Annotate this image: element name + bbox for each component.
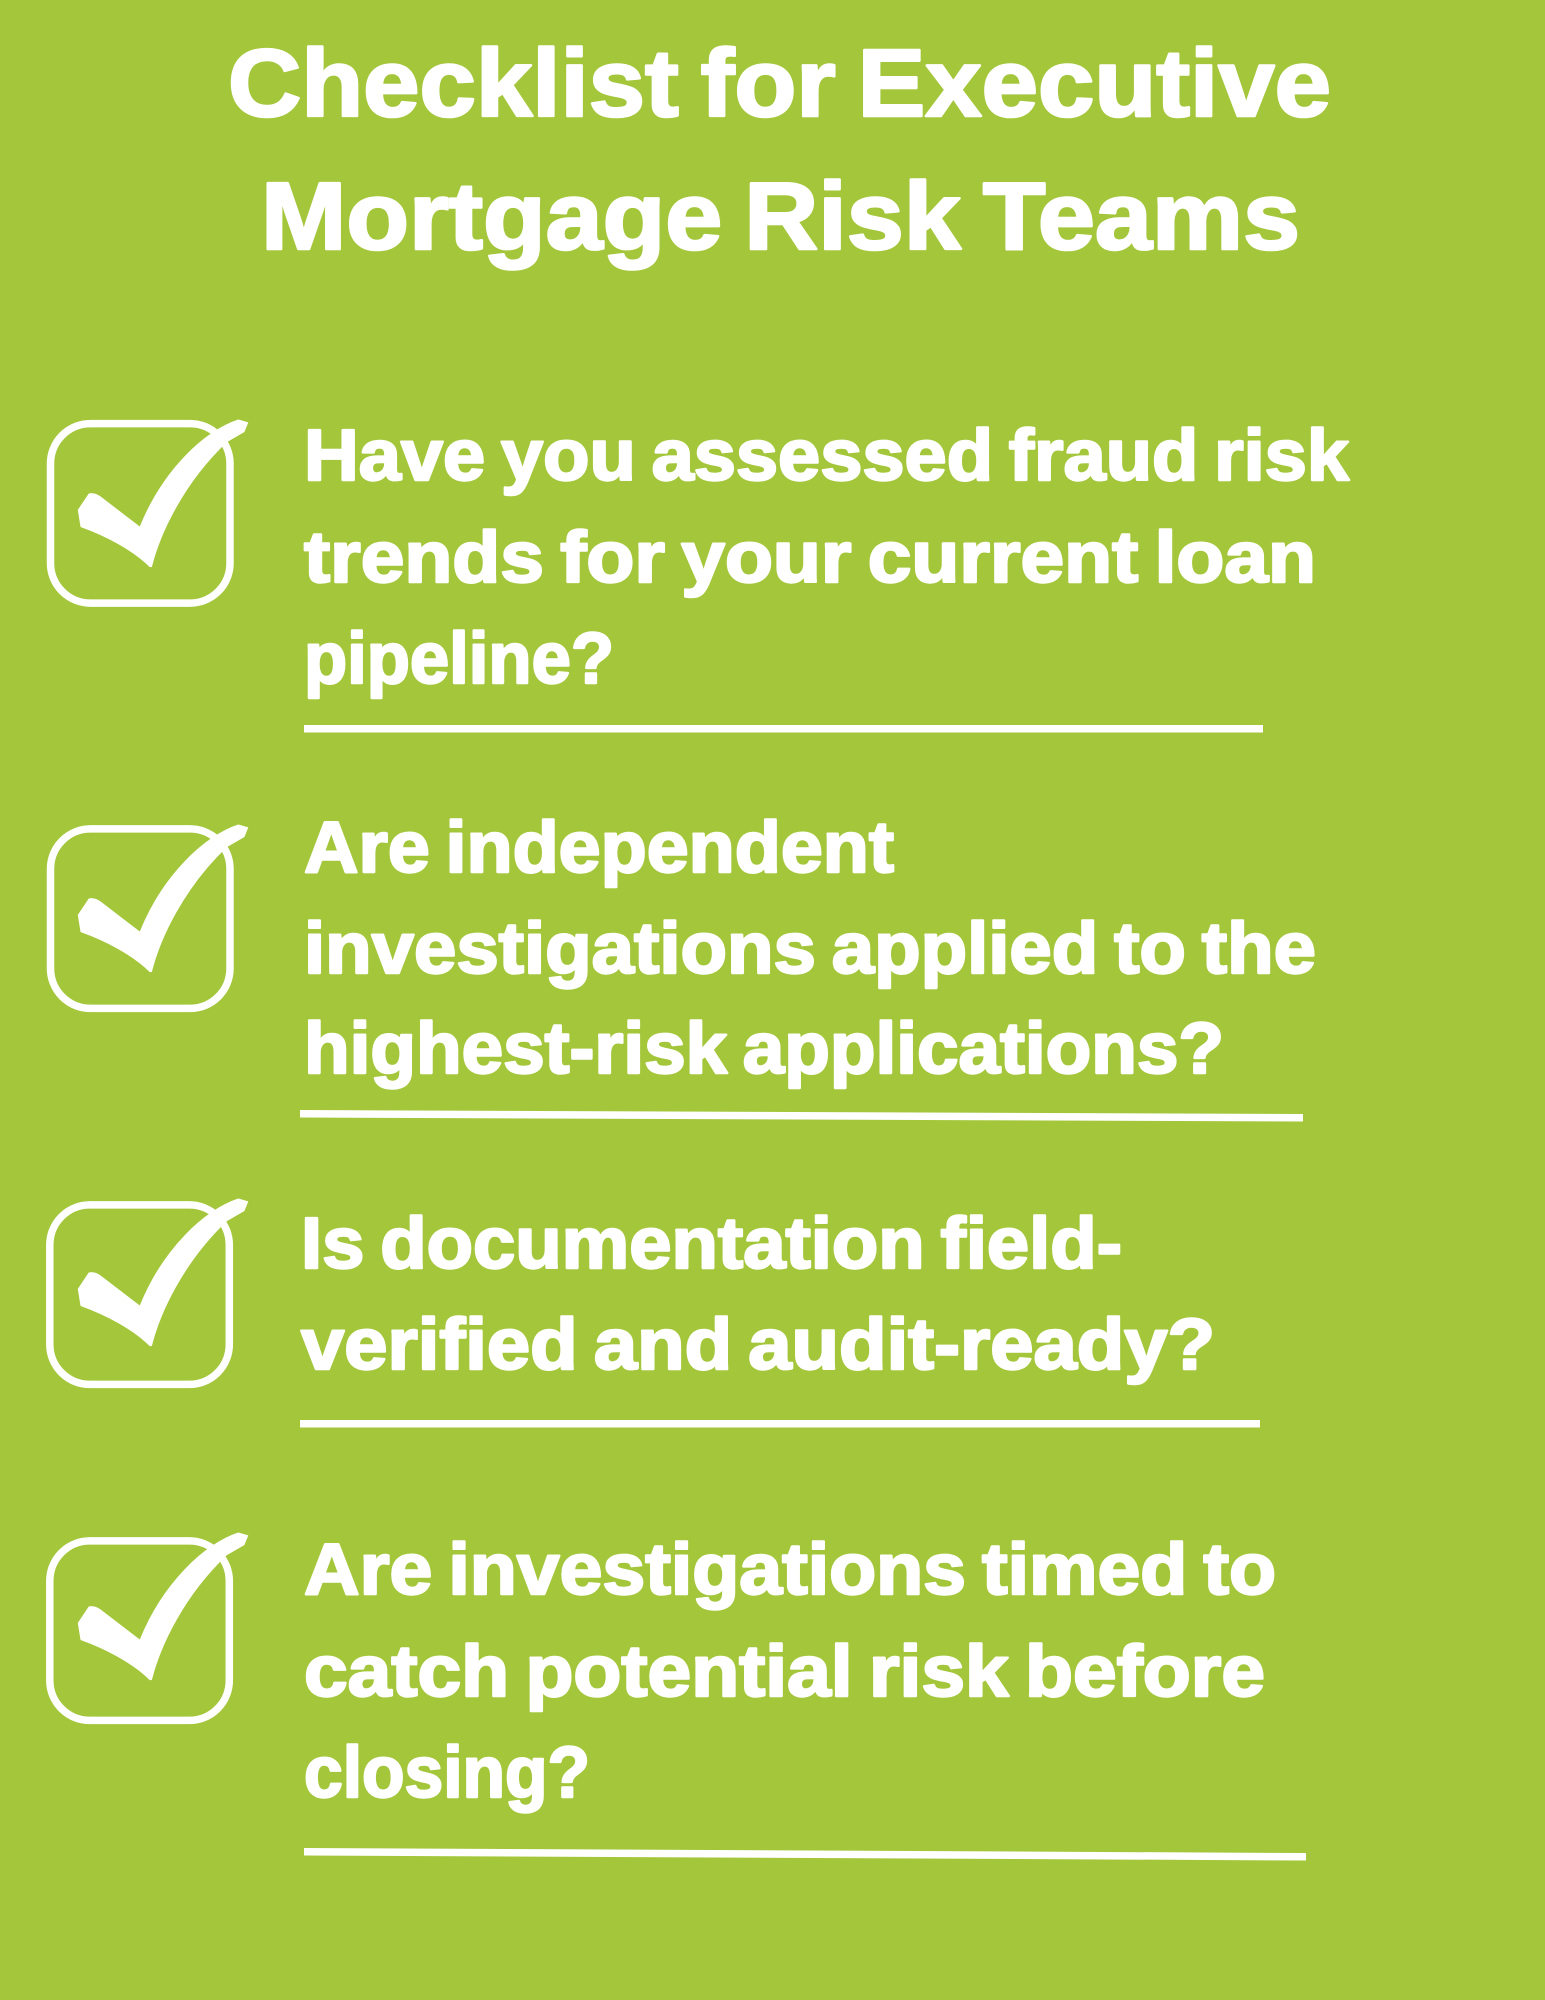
question 4 text: Are investigations timed to	[304, 1530, 1276, 1610]
question 4 text: catch potential risk before	[304, 1632, 1265, 1712]
panel: item 2	[50, 808, 1316, 1122]
question 3 text: verified and audit-ready?	[301, 1305, 1215, 1385]
icon: checkbox 3	[50, 1199, 248, 1384]
answer line 1	[304, 725, 1263, 732]
question 1 text: pipeline?	[304, 619, 614, 699]
title: Checklist for Executive	[228, 30, 1331, 137]
panel: item 3	[50, 1199, 1260, 1428]
title: Mortgage Risk Teams	[261, 163, 1300, 270]
panel: item 4	[50, 1530, 1306, 1860]
question 2 text: highest-risk applications?	[304, 1009, 1224, 1089]
question 1 text: Have you assessed fraud risk	[304, 416, 1350, 496]
icon: checkbox 4	[50, 1533, 248, 1720]
answer line 4	[304, 1848, 1306, 1860]
question 2 text: investigations applied to the	[304, 909, 1316, 989]
icon: checkbox 2	[50, 825, 248, 1008]
title	[228, 30, 1331, 270]
panel: item 1	[50, 416, 1350, 732]
question 3 text	[301, 1204, 1215, 1385]
answer line 3	[300, 1420, 1260, 1428]
answer line 2	[300, 1110, 1303, 1122]
icon: checkbox 1	[50, 420, 248, 603]
question 1 text	[304, 416, 1350, 699]
question 3 text: Is documentation field-	[301, 1204, 1122, 1284]
question 4 text: closing?	[304, 1733, 590, 1813]
question 2 text	[304, 808, 1316, 1089]
question 1 text: trends for your current loan	[304, 518, 1316, 598]
question 4 text	[304, 1530, 1276, 1813]
question 2 text: Are independent	[304, 808, 894, 888]
